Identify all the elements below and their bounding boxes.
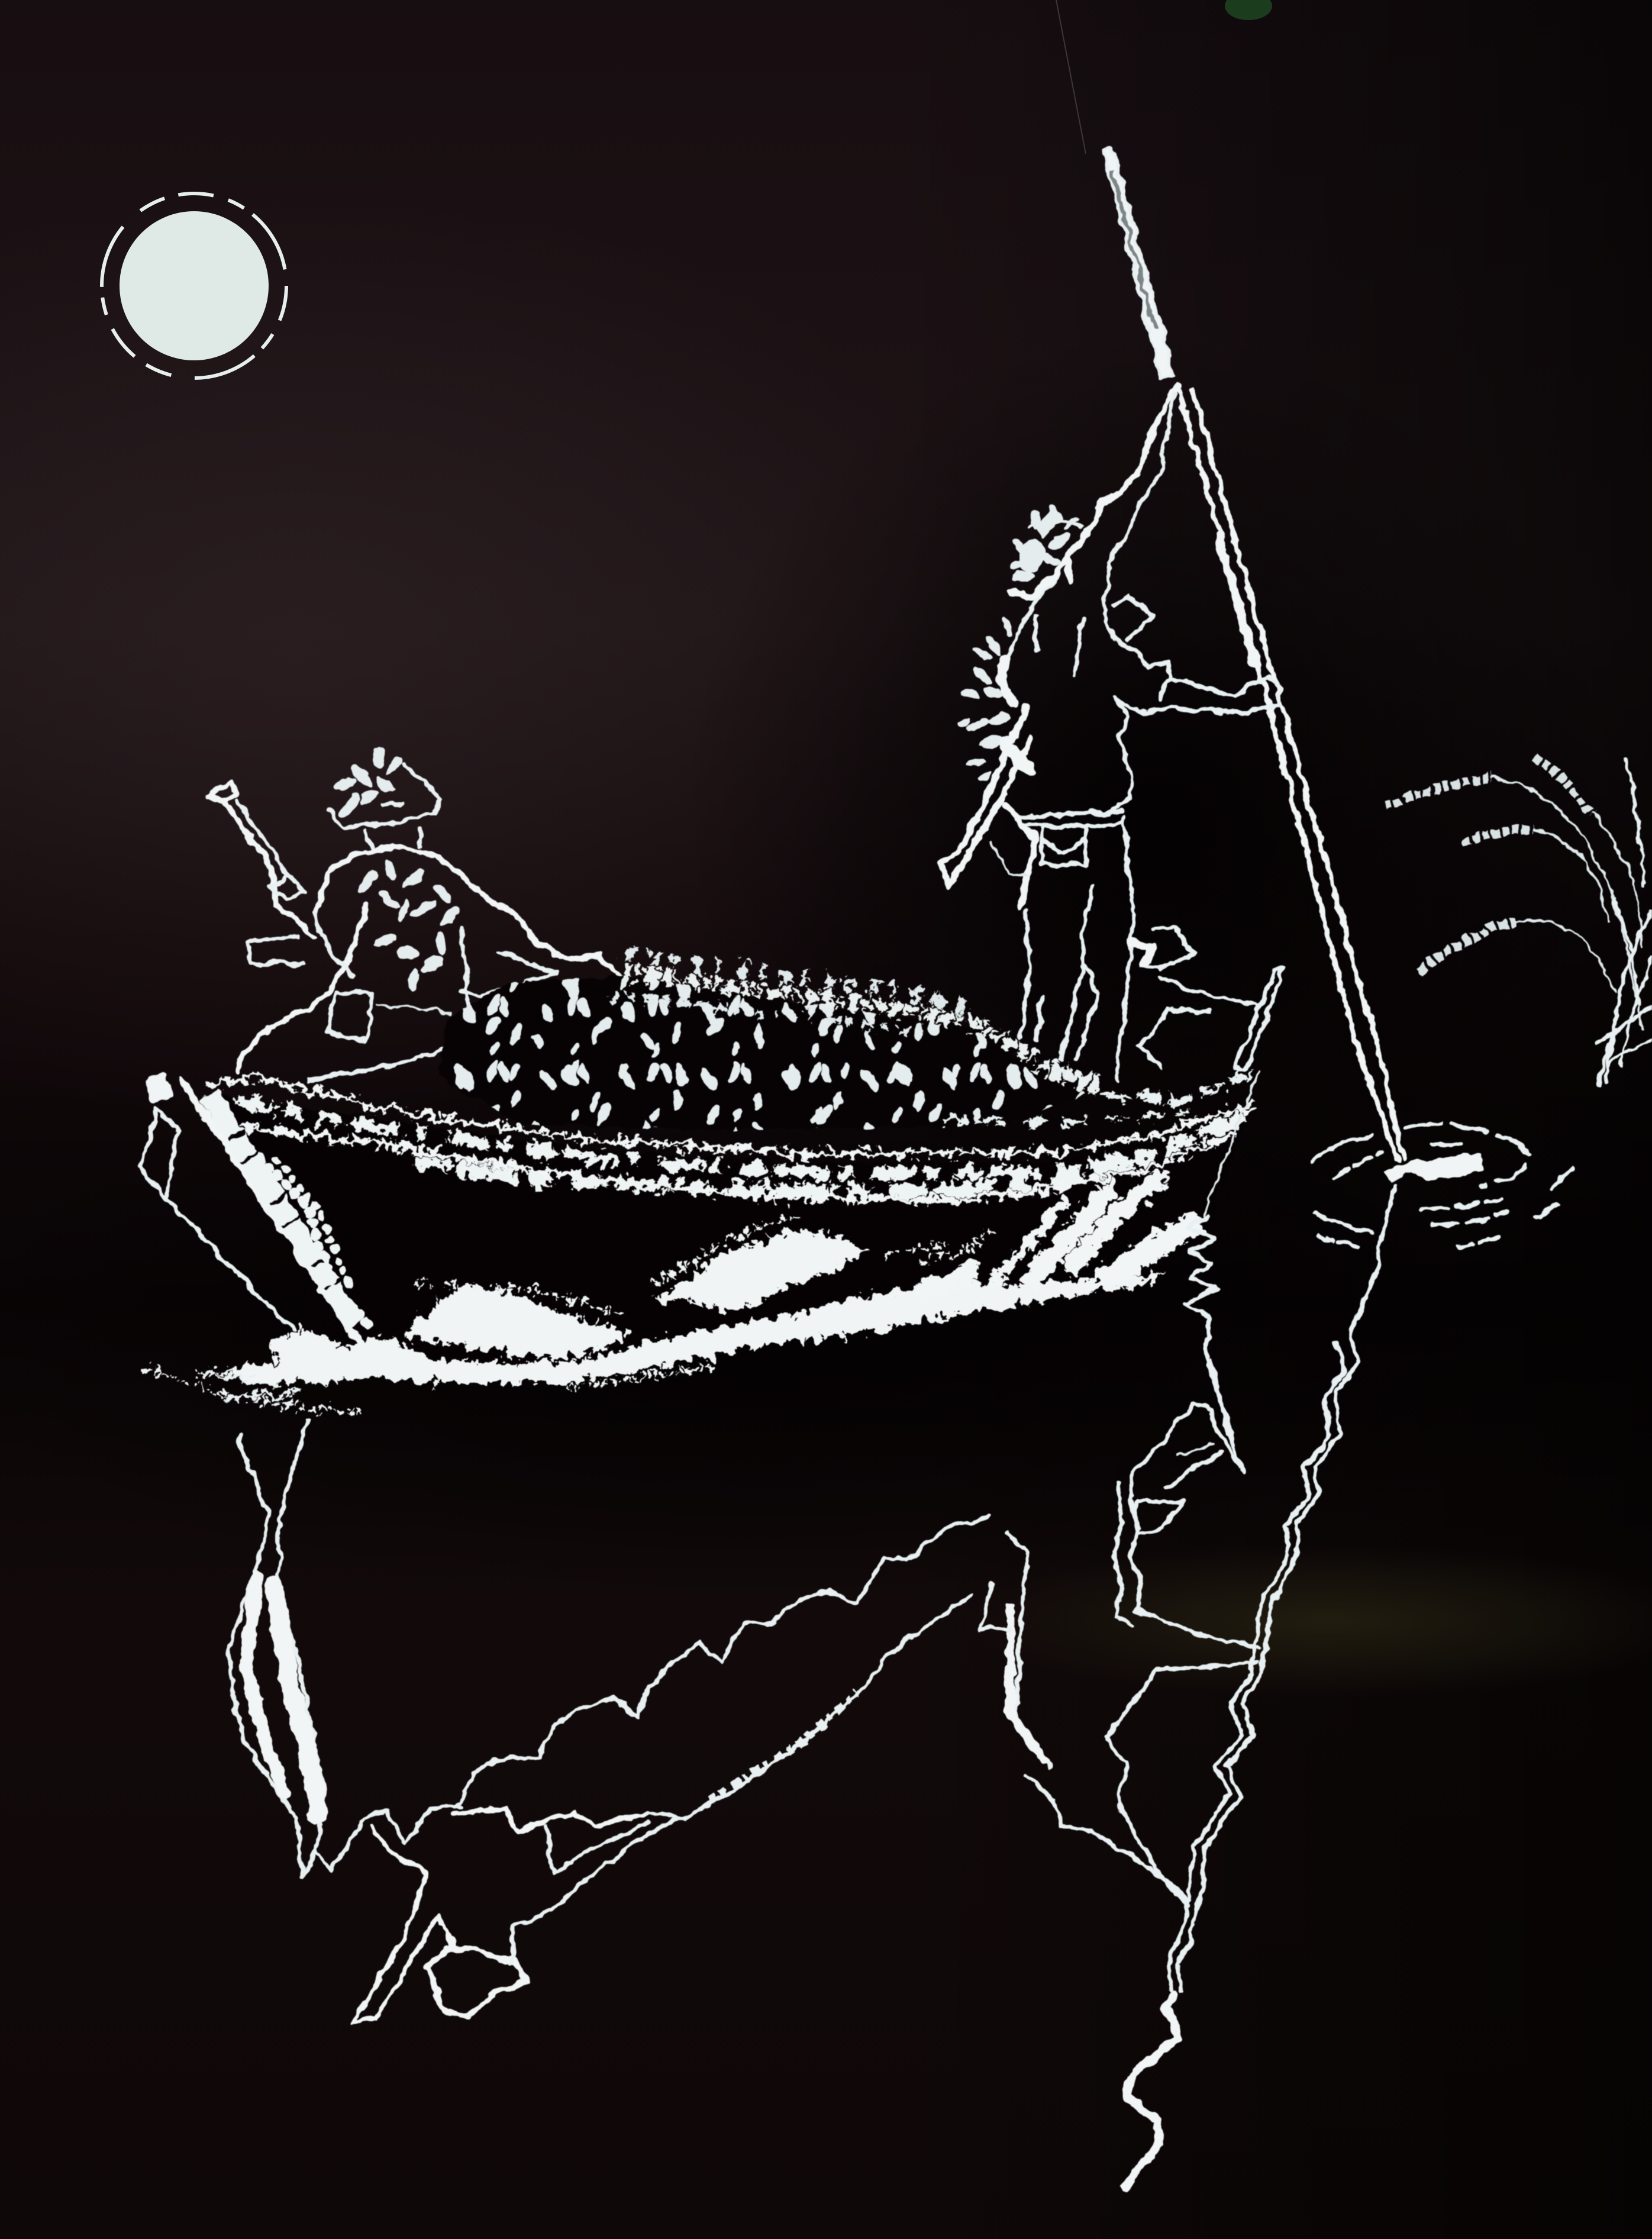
- third figure: crouching man at stern: [1132, 926, 1257, 1067]
- hat: [327, 745, 441, 828]
- hat with leaves: [1008, 502, 1083, 598]
- pole: lower segment: [1179, 391, 1403, 1162]
- reflection: pole double line: [1127, 1186, 1394, 2185]
- moon: [102, 193, 286, 378]
- shirt leaf pattern: [356, 857, 461, 992]
- raised arm and torso: [1008, 386, 1280, 809]
- pole: upper segment: [1104, 148, 1175, 379]
- legs: [1020, 818, 1134, 1079]
- reflection: boat hull upper edge: [455, 1518, 987, 1806]
- standing man: [939, 386, 1280, 1079]
- body outline: [237, 828, 625, 1081]
- rifle: [208, 782, 314, 963]
- reflection: seated man: [353, 1818, 676, 2022]
- reflection: bow: [228, 1420, 460, 1877]
- boat hull and rim: [208, 1071, 1259, 1361]
- pouch and belt: [327, 991, 451, 1040]
- rifle: [939, 706, 1030, 886]
- reflection: stern line wavy: [1186, 1216, 1242, 1472]
- reflection: boat hull lower edge: [455, 1595, 970, 1831]
- leafy spray on back: [956, 617, 1014, 783]
- reflection: standing man: [1105, 1361, 1259, 1900]
- cargo: leaf pile: [438, 953, 1101, 1130]
- grass at right edge: [1385, 757, 1652, 1085]
- stern post: [1235, 969, 1283, 1071]
- reflection: stern: [982, 1532, 1190, 1905]
- bow: [140, 1073, 372, 1362]
- waves: bow wave and wake: [148, 1180, 1191, 1414]
- seated man with rifle: [208, 745, 625, 1081]
- ripples around pole: [1312, 1124, 1574, 1248]
- belt, pouch and holster: [993, 805, 1121, 905]
